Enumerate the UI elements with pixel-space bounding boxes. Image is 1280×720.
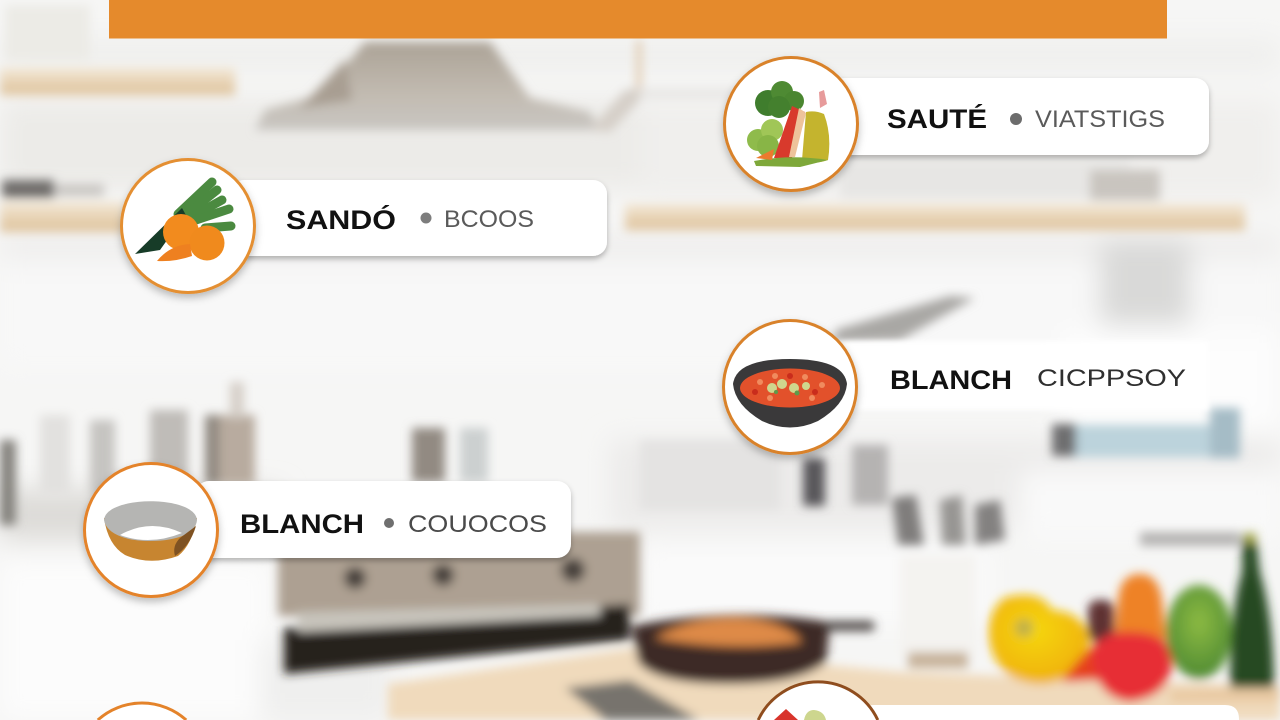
top left cabinet box <box>5 5 90 60</box>
label pill: blanch couocos: COUOCOS <box>408 511 547 538</box>
range hood <box>255 42 600 130</box>
left shelf <box>0 202 125 232</box>
title banner <box>109 0 1167 38</box>
pan <box>632 615 830 684</box>
icon circle: ring bowl <box>84 464 218 596</box>
appliances right <box>640 440 780 510</box>
label pill: blanch couocos <box>195 481 571 558</box>
peppers and vegetables <box>989 595 1090 684</box>
label pill: sandó: SANDÓ <box>286 204 396 235</box>
hood shadow right <box>835 296 975 342</box>
label pill: sandó: BCOOS <box>444 206 534 233</box>
label pill: sauté: VIATSTIGS <box>1035 106 1165 133</box>
technique card: sandó <box>122 160 607 292</box>
technique card: bottom left icon circle <box>98 703 186 720</box>
label pill: bottom right <box>860 705 1239 720</box>
icon circle: stew bowl <box>724 320 856 454</box>
canisters <box>0 440 16 525</box>
icon circle: bottom right <box>758 682 878 720</box>
label pill: blanch copy: BLANCH <box>890 365 1012 395</box>
label pill: sauté <box>830 78 1209 155</box>
counter <box>388 647 1280 720</box>
technique card: bottom right <box>758 682 1239 720</box>
right shelf <box>625 204 1245 230</box>
technique card: blanch (ring bowl) <box>84 464 571 596</box>
label pill: blanch couocos: BLANCH <box>240 509 364 539</box>
jar <box>900 555 976 655</box>
stove <box>278 532 640 616</box>
icon circle: vegetables <box>724 58 858 190</box>
label pill: sauté: SAUTÉ <box>887 103 987 134</box>
top shelf <box>0 68 235 95</box>
label pill: sandó <box>230 180 607 256</box>
label pill: blanch copy <box>830 341 1208 410</box>
icon circle: carrots and greens <box>122 160 254 292</box>
technique card: sauté <box>724 58 1209 190</box>
label pill: blanch copy: CICPPSOY <box>1037 365 1186 392</box>
technique card: blanch (bowl of stew) <box>724 320 1208 454</box>
